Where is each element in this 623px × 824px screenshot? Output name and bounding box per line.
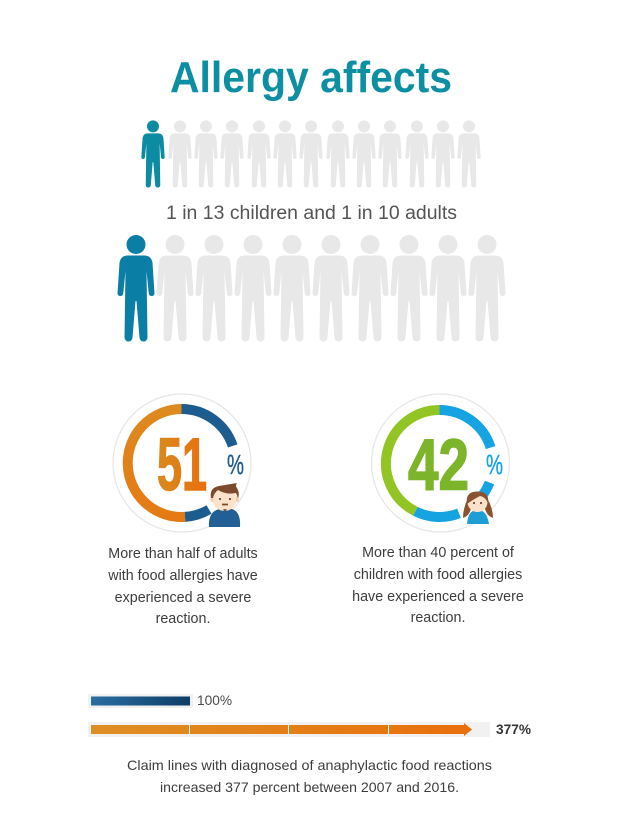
caption: adults: reaction. bbox=[156, 611, 210, 627]
caption: children: reaction. bbox=[411, 610, 465, 626]
caption: children: More than 40 percent of bbox=[362, 545, 514, 561]
icon: girl bbox=[463, 492, 493, 524]
label: 100%: 100% bbox=[197, 692, 232, 708]
footer text: increased 377 percent between 2007 and 2016. bbox=[160, 779, 459, 795]
bar: 377 percent increase bbox=[88, 721, 532, 737]
percent sign: % bbox=[227, 449, 244, 480]
percent sign: % bbox=[486, 449, 503, 480]
panel: children 42 percent bbox=[352, 394, 524, 626]
donut chart: 51 percent bbox=[113, 394, 251, 532]
caption: adults bbox=[107, 546, 258, 627]
subtitle: 1 in 13 children and 1 in 10 adults bbox=[166, 203, 457, 224]
value: 42: 42 bbox=[408, 426, 469, 506]
caption: adults: experienced a severe bbox=[115, 590, 251, 606]
caption: children bbox=[352, 545, 524, 626]
title: Allergy affects bbox=[170, 53, 452, 102]
icon: man bbox=[209, 483, 240, 527]
value: 51: 51 bbox=[157, 423, 207, 506]
label: 377%: 377% bbox=[496, 721, 532, 737]
caption: adults: More than half of adults bbox=[108, 546, 258, 562]
pictogram: 1 in 10 adults bbox=[118, 235, 506, 342]
panel: adults 51 percent bbox=[107, 394, 258, 627]
donut chart: 42 percent bbox=[372, 394, 510, 532]
footer text: Claim lines with diagnosed of anaphylactic food reactions bbox=[127, 757, 492, 773]
caption: adults: with food allergies have bbox=[107, 568, 258, 584]
caption: children: children with food allergies bbox=[354, 567, 522, 583]
bar: 100 percent baseline bbox=[88, 692, 232, 708]
pictogram: 1 in 13 children bbox=[141, 120, 481, 188]
caption: children: have experienced a severe bbox=[352, 589, 524, 605]
footer text bbox=[127, 757, 492, 795]
